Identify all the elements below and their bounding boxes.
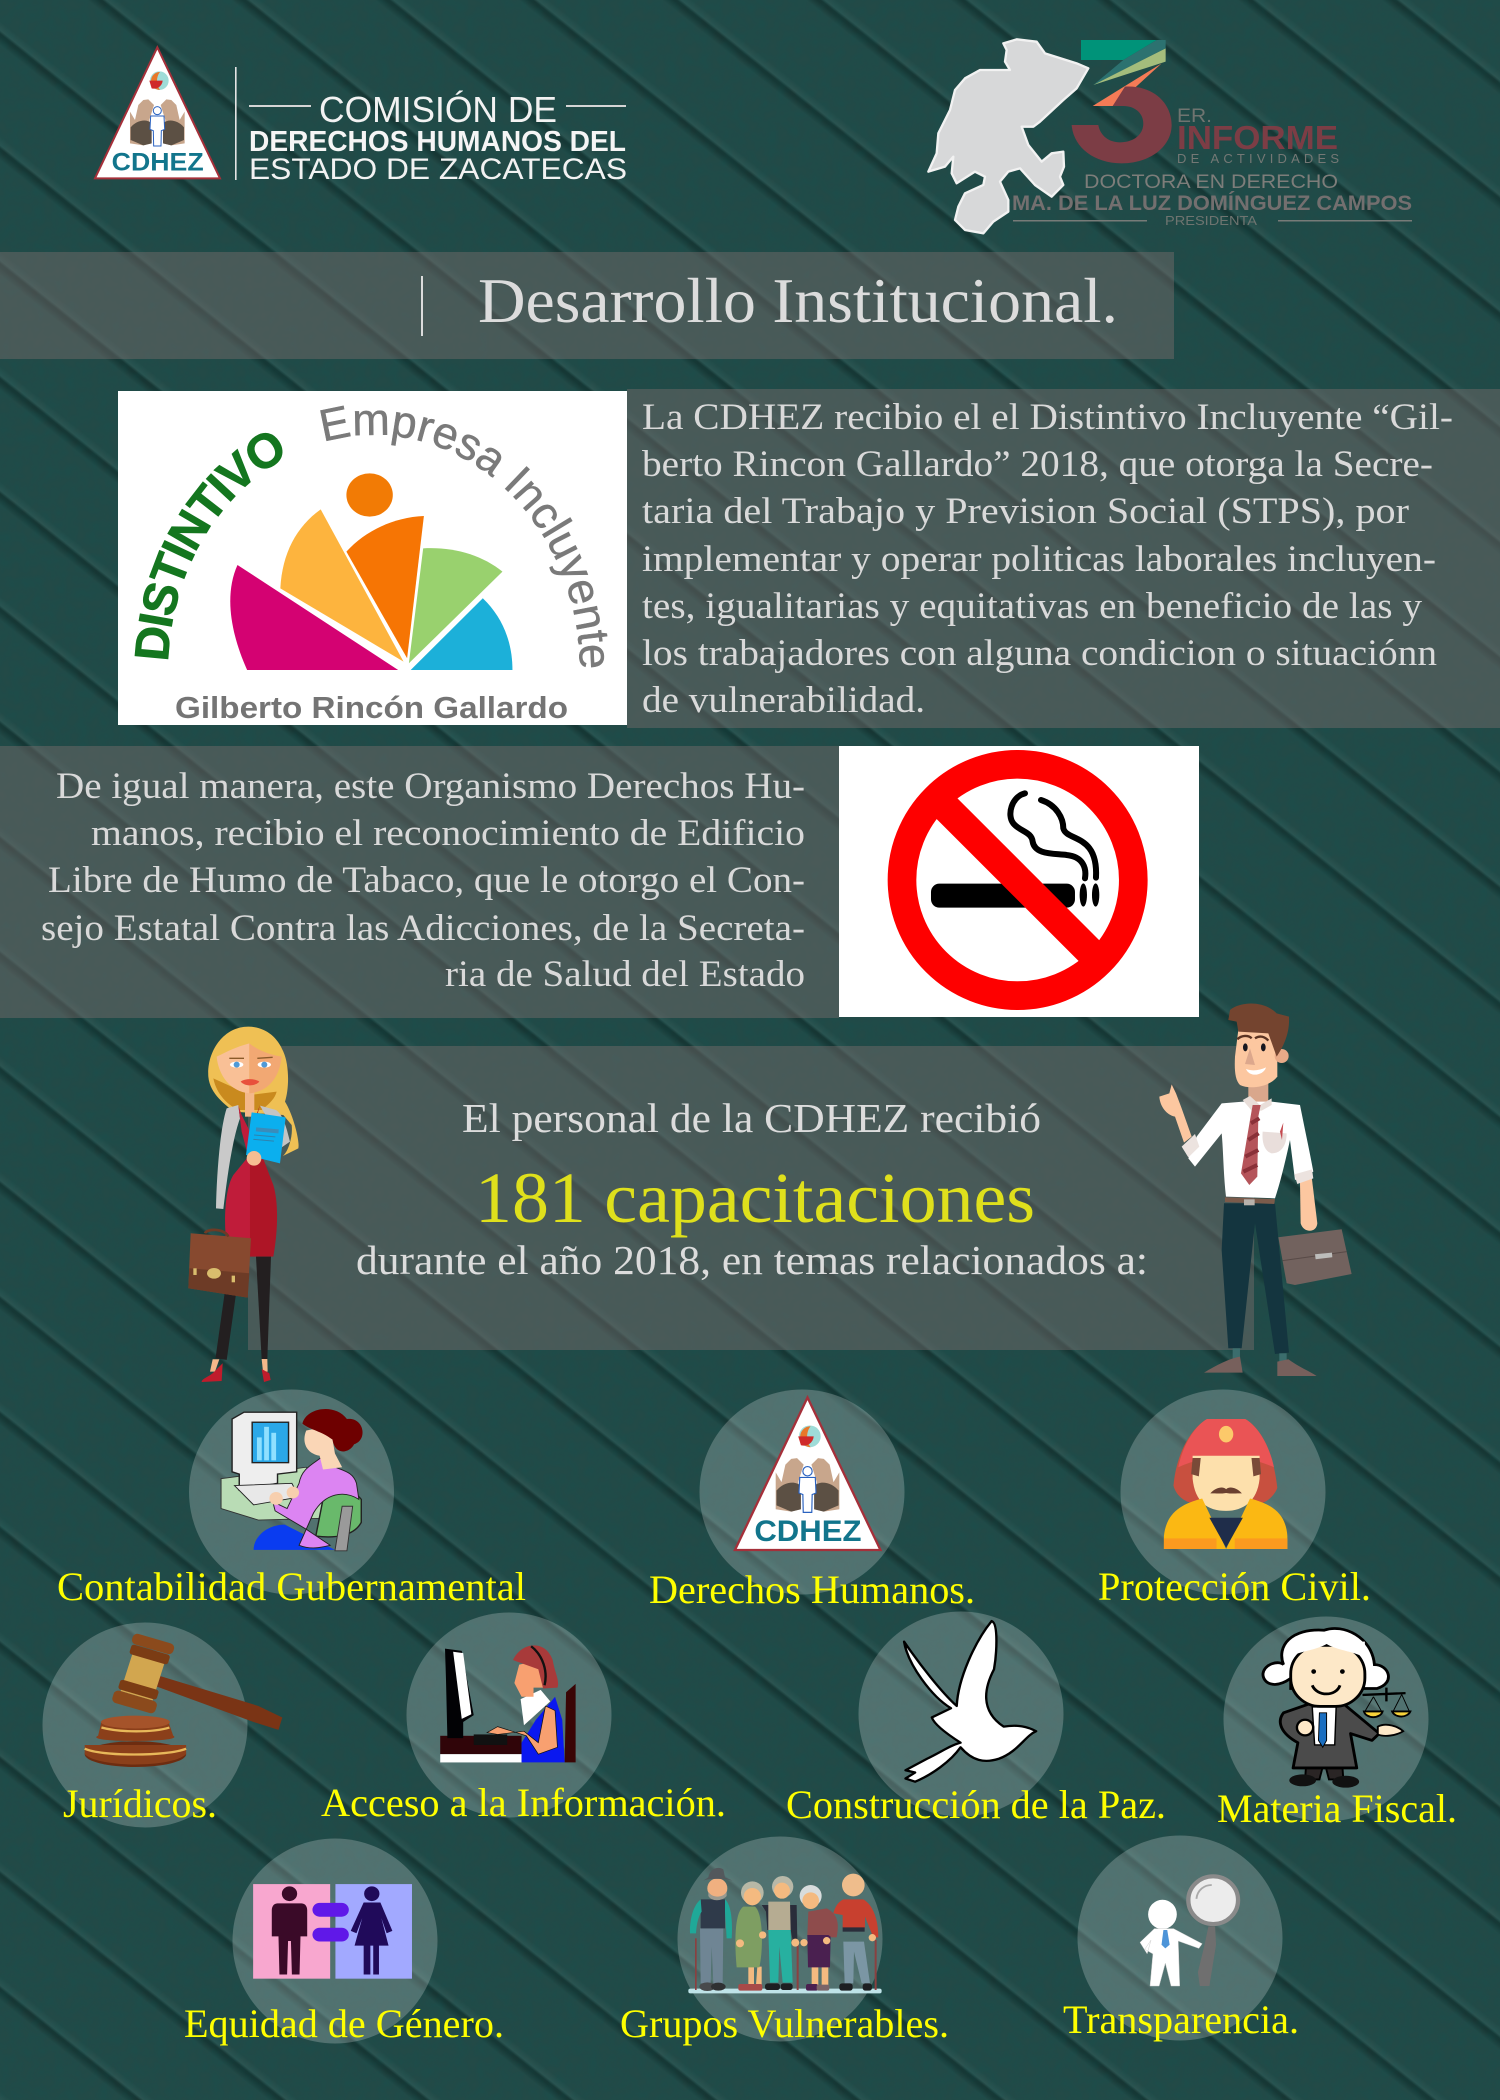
illustration: businessman bbox=[1159, 1004, 1352, 1376]
Distintivo Empresa Incluyente logo: Gilberto Rincón Gallardo bbox=[175, 690, 568, 725]
Distintivo Empresa Incluyente logo: Empresa Incluyente bbox=[320, 406, 608, 668]
item: Acceso a la Información bbox=[321, 1612, 726, 1825]
icon: judge with scales bbox=[1263, 1628, 1410, 1788]
item: Acceso a la Información: Acceso a la Información. bbox=[321, 1780, 726, 1825]
item: Contabilidad Gubernamental: Contabilidad Gubernamental bbox=[57, 1564, 526, 1609]
item: Protección Civil: Protección Civil. bbox=[1098, 1564, 1371, 1609]
organization name bbox=[235, 67, 627, 186]
icon: CDHEZ logo bbox=[735, 1398, 880, 1550]
organization name: ESTADO DE ZACATECAS bbox=[249, 153, 627, 186]
logo: CDHEZ triangle: CDHEZ bbox=[112, 149, 204, 177]
item: Transparencia bbox=[1063, 1836, 1299, 2042]
panel: trainings callout bbox=[248, 1046, 1254, 1350]
item: Jurídicos: Jurídicos. bbox=[63, 1781, 217, 1826]
panel: Distintivo text: La CDHEZ recibio el el Distintivo Incluyente “Gil- bbox=[642, 397, 1453, 438]
icon: gavel bbox=[85, 1632, 282, 1767]
item: Derechos Humanos bbox=[649, 1390, 975, 1612]
item: Materia Fiscal: Materia Fiscal. bbox=[1217, 1786, 1457, 1831]
icon: woman at computer bbox=[221, 1409, 363, 1551]
panel: Distintivo text: los trabajadores con alguna condicion o situaciónn bbox=[642, 633, 1437, 674]
panel: Edificio Libre de Humo text: De igual manera, este Organismo Derechos Hu- bbox=[56, 766, 805, 807]
icon: person with magnifying glass bbox=[1140, 1876, 1238, 1986]
organization name: COMISIÓN DE bbox=[319, 89, 557, 130]
panel: Distintivo text: implementar y operar politicas laborales incluyen- bbox=[642, 539, 1436, 580]
panel: trainings callout: El personal de la CDHEZ recibió bbox=[462, 1095, 1041, 1141]
item: Construcción de la Paz: Construcción de la Paz. bbox=[786, 1782, 1166, 1827]
item: Protección Civil bbox=[1098, 1390, 1371, 1609]
organization name: DERECHOS HUMANOS DEL bbox=[249, 126, 626, 158]
panel: Distintivo text: taria del Trabajo y Prevision Social (STPS), por bbox=[642, 491, 1409, 532]
panel: Distintivo text: berto Rincon Gallardo” 2018, que otorga la Secre- bbox=[642, 444, 1433, 485]
third report emblem: ER. bbox=[1177, 106, 1212, 127]
Distintivo Empresa Incluyente logo bbox=[118, 391, 627, 725]
panel: trainings callout: 181 capacitaciones bbox=[475, 1158, 1035, 1238]
item: Materia Fiscal bbox=[1217, 1616, 1457, 1831]
panel: Edificio Libre de Humo text: sejo Estatal Contra las Adicciones, de la Secreta- bbox=[41, 908, 805, 949]
panel: Edificio Libre de Humo text: ria de Salud del Estado bbox=[445, 954, 805, 995]
item: Grupos Vulnerables: Grupos Vulnerables. bbox=[620, 2001, 949, 2046]
panel: Edificio Libre de Humo text: manos, recibio el reconocimiento de Edificio bbox=[91, 813, 805, 854]
panel: Distintivo text: de vulnerabilidad. bbox=[642, 680, 925, 721]
item: Grupos Vulnerables bbox=[620, 1836, 949, 2046]
item: Transparencia: Transparencia. bbox=[1063, 1997, 1299, 2042]
map of Zacatecas bbox=[928, 39, 1088, 233]
icon: no smoking sign bbox=[839, 746, 1199, 1017]
panel: Edificio Libre de Humo text: Libre de Humo de Tabaco, que le otorgo el Con- bbox=[48, 860, 805, 901]
logo: CDHEZ triangle bbox=[95, 47, 220, 178]
icon: gender equality bbox=[253, 1884, 412, 1979]
third report emblem: PRESIDENTA bbox=[1165, 213, 1257, 228]
item: Contabilidad Gubernamental bbox=[57, 1390, 526, 1609]
item: Derechos Humanos: Derechos Humanos. bbox=[649, 1567, 975, 1612]
illustration: businesswoman bbox=[188, 1027, 299, 1382]
third report emblem: INFORME bbox=[1177, 119, 1338, 156]
panel: trainings callout: durante el año 2018, en temas relacionados a: bbox=[356, 1237, 1148, 1283]
icon: woman at terminal bbox=[440, 1645, 576, 1762]
panel: Distintivo text: tes, igualitarias y equitativas en beneficio de las y bbox=[642, 586, 1423, 627]
title band: Desarrollo Institucional. bbox=[478, 265, 1118, 336]
item: Equidad de Género bbox=[184, 1838, 504, 2046]
Distintivo Empresa Incluyente logo: DISTINTIVO bbox=[134, 432, 282, 660]
item: Jurídicos bbox=[42, 1622, 282, 1828]
item: Equidad de Género: Equidad de Género. bbox=[184, 2001, 504, 2046]
panel: Edificio Libre de Humo text bbox=[0, 746, 839, 1018]
icon: CDHEZ logo: CDHEZ bbox=[754, 1515, 861, 1548]
icon: firefighter bbox=[1164, 1419, 1287, 1549]
third report emblem: DOCTORA EN DERECHO bbox=[1084, 172, 1338, 193]
third report emblem: MA. DE LA LUZ DOMÍNGUEZ CAMPOS bbox=[1012, 192, 1412, 215]
icon: dove bbox=[904, 1621, 1036, 1782]
title band bbox=[0, 252, 1174, 359]
third report emblem bbox=[1012, 40, 1412, 228]
third report emblem: DE ACTIVIDADES bbox=[1177, 151, 1339, 166]
panel: Distintivo text bbox=[627, 389, 1500, 728]
item: Construcción de la Paz bbox=[786, 1612, 1166, 1827]
icon: group of seniors bbox=[688, 1868, 882, 1993]
